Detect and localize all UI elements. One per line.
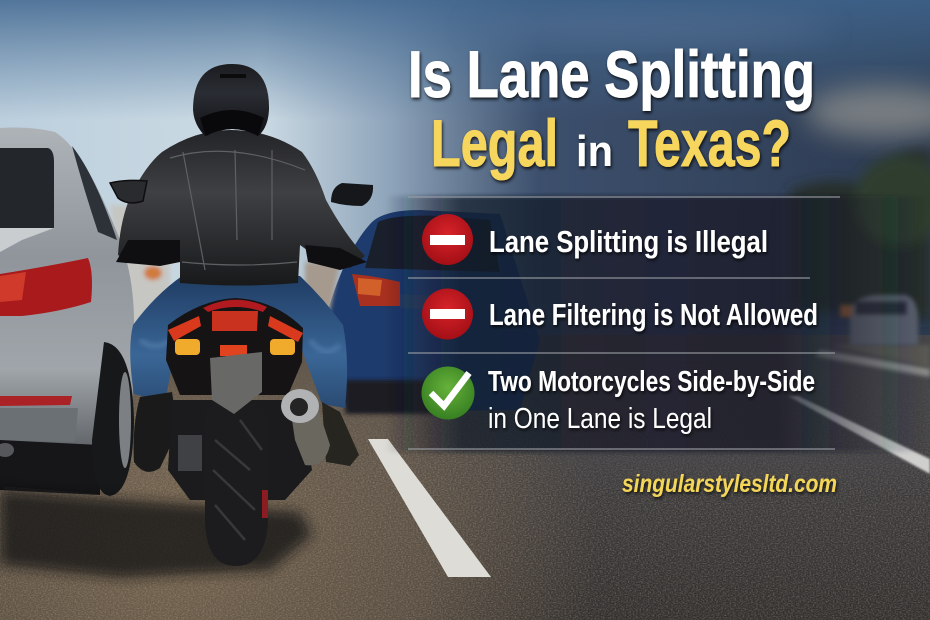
left boot [134,392,178,472]
text: two motorcycles side-by-side in one lane is legal [488,366,815,435]
helmet [193,64,269,136]
text: two motorcycles side-by-side in one lane is legal: Two Motorcycles Side-by-Side [488,366,815,398]
website url: singularstylesltd.com [622,470,837,498]
icon: green check mark [422,366,474,420]
text: two motorcycles side-by-side in one lane is legal: in One Lane is Legal [488,403,712,435]
silver car on the left [0,128,134,496]
background: road [0,335,930,620]
motorcycle [166,298,330,566]
text: lane splitting is illegal: Lane Splitting is Illegal [489,224,768,259]
icon: red no-entry sign [422,288,473,340]
background traffic between vehicles [110,205,340,335]
blue car on the right [325,210,540,414]
title line 2: Legal [431,106,558,180]
rider legs: jeans [130,276,347,408]
title [408,37,815,180]
right boot [322,402,359,466]
left mirror [110,180,147,203]
gloves [116,240,180,266]
rear wheel and chassis [168,400,312,566]
background: distant blurred car [840,295,918,345]
title line 1: Is Lane Splitting [408,37,815,111]
tail section with lights [166,298,303,395]
list item: lane splitting illegal [422,214,768,265]
background: sky [0,0,930,340]
mudguard [210,352,262,414]
icon: red no-entry sign [422,214,473,265]
dark overlay panel behind list [385,196,930,452]
exhaust [281,389,330,465]
title line 2: in [576,127,613,176]
list item: lane filtering not allowed [422,288,818,340]
title line 2 [431,106,791,180]
rider upper body [116,64,367,286]
text: lane filtering is not allowed: Lane Filtering is Not Allowed [489,297,818,332]
ground shadow under motorcycle and car [0,490,312,578]
road lane marking: centre dash [368,439,491,577]
road lane marking: right line [788,396,930,474]
right mirror [331,183,373,206]
list item: two motorcycles legal [422,366,815,435]
background: blurred roadside trees [790,149,930,320]
title line 2: Texas? [628,106,791,180]
jacket [118,130,365,286]
